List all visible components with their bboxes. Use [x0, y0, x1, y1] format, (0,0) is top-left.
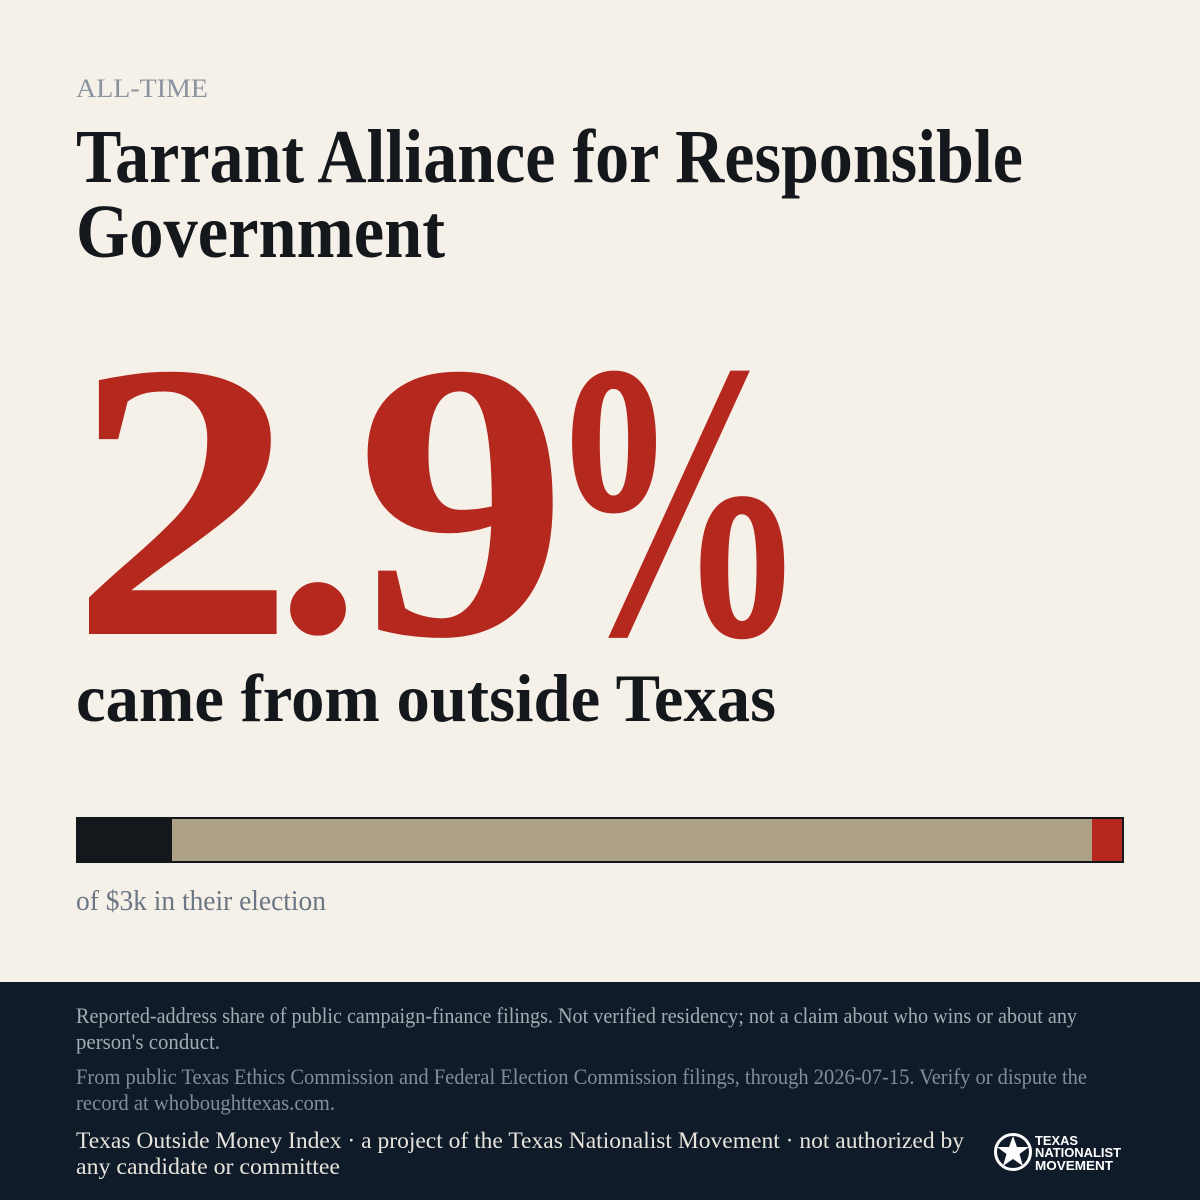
statistic caption: came from outside Texas: [76, 660, 776, 736]
eyebrow label: ALL-TIME: [76, 74, 208, 103]
logo wordmark: MOVEMENT: [1035, 1158, 1113, 1173]
big percentage statistic: .: [275, 338, 361, 703]
big percentage statistic: 9: [356, 281, 568, 720]
logo wordmark: TEXAS: [1035, 1133, 1078, 1148]
logo wordmark: NATIONALIST: [1035, 1145, 1121, 1160]
title: [76, 115, 1023, 274]
source note: From public Texas Ethics Commission and Federal Election Commission filings, through 2026-07-15. Verify or dispute the: [76, 1064, 1087, 1089]
source note: [76, 1064, 1087, 1115]
title: Government: [76, 190, 445, 274]
attribution: Texas Outside Money Index · a project of the Texas Nationalist Movement · not authorized by: [76, 1128, 964, 1153]
big percentage statistic: [70, 281, 809, 720]
bar segment: Texas share: [172, 819, 1092, 861]
methodology note: person's conduct.: [76, 1029, 220, 1054]
attribution: [76, 1128, 964, 1179]
methodology note: [76, 1003, 1077, 1054]
icon: star in ring: [996, 1134, 1030, 1170]
methodology note: Reported-address share of public campaign-finance filings. Not verified residency; not a claim about who wins or about any: [76, 1003, 1077, 1028]
logo wordmark: [1035, 1133, 1121, 1173]
source note: record at whoboughttexas.com.: [76, 1090, 335, 1115]
footer panel: [0, 982, 1200, 1200]
bar caption: of $3k in their election: [76, 885, 326, 917]
bar segment: outside Texas share: [1092, 819, 1122, 861]
logo: Texas Nationalist Movement: [996, 1133, 1121, 1173]
title: Tarrant Alliance for Responsible: [76, 115, 1023, 199]
attribution: any candidate or committee: [76, 1154, 340, 1179]
big percentage statistic: %: [545, 281, 809, 720]
stacked share bar: [76, 817, 1124, 863]
big percentage statistic: 2: [70, 281, 296, 720]
